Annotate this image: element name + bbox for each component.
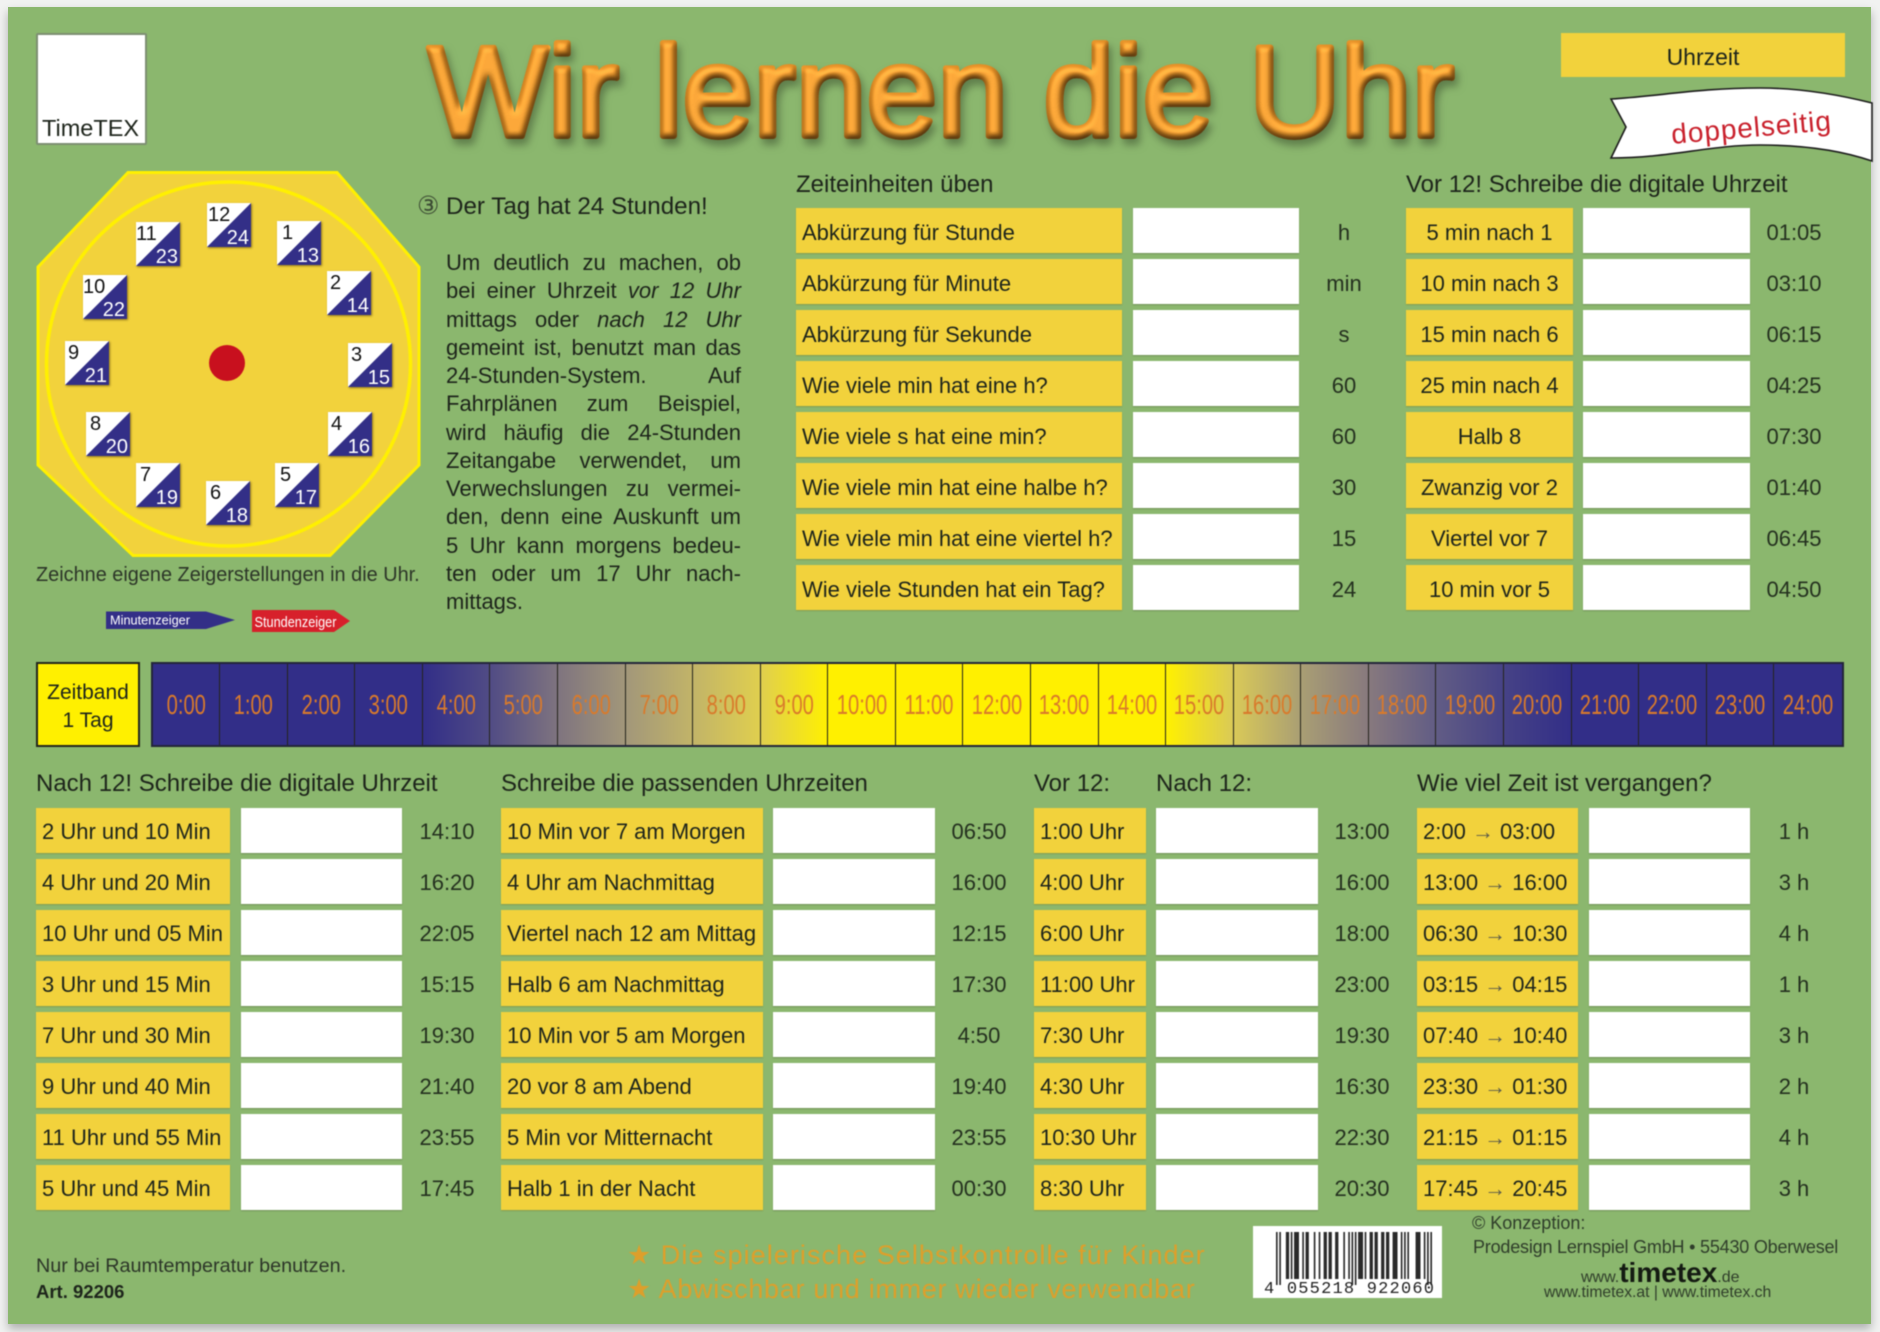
row 6: 30 bbox=[1332, 475, 1356, 500]
row 7: 06:45 bbox=[1766, 526, 1822, 551]
tag: Uhrzeit: Uhrzeit bbox=[1667, 44, 1739, 70]
paragraph: Um deutlich zu machen, ob bbox=[446, 250, 741, 275]
time band 0:00 to 24:00: 22:00 bbox=[1647, 688, 1698, 720]
title: Wir lernen die Uhr bbox=[428, 21, 1454, 164]
row 1: Abkürzung für Stunde bbox=[802, 220, 1015, 245]
time band 0:00 to 24:00: 17:00 bbox=[1309, 688, 1360, 720]
tile 5/17 bbox=[275, 463, 319, 509]
row 4 bbox=[1406, 360, 1822, 408]
tile 2/14: 2 bbox=[330, 272, 341, 294]
row 5 bbox=[796, 411, 1356, 458]
row 1 bbox=[500, 807, 1007, 854]
time band 0:00 to 24:00: 11:00 bbox=[905, 688, 954, 720]
tile 8/20: 8 bbox=[90, 413, 101, 435]
row 5 bbox=[1417, 1012, 1847, 1057]
row 4 bbox=[1417, 961, 1847, 1006]
legend: Minutenzeiger arrow bbox=[106, 612, 235, 629]
row 1: 1:00 Uhr bbox=[1040, 819, 1124, 844]
tile 11/23 bbox=[136, 222, 180, 268]
row 4 bbox=[1034, 961, 1406, 1006]
row 3: Viertel nach 12 am Mittag bbox=[507, 921, 756, 946]
row 2: 16:00 bbox=[951, 870, 1007, 895]
heading: Wie viel Zeit ist vergangen? bbox=[1417, 770, 1712, 797]
row 5: Wie viele s hat eine min? bbox=[802, 424, 1047, 449]
paragraph: 24-Stunden-System. Auf bbox=[446, 363, 741, 388]
row 3 bbox=[1034, 910, 1406, 955]
numbered heading: Der Tag hat 24 Stunden! bbox=[446, 193, 708, 220]
row 5: Halb 8 bbox=[1458, 424, 1521, 449]
time band 0:00 to 24:00: 5:00 bbox=[504, 688, 543, 720]
legend: Minutenzeiger arrow: Minutenzeiger bbox=[110, 612, 191, 628]
tile 7/19 bbox=[136, 463, 180, 509]
row 8: 24 bbox=[1332, 577, 1356, 602]
row 3: s bbox=[1338, 322, 1350, 347]
row 6: 20 vor 8 am Abend bbox=[507, 1074, 692, 1099]
slogan 2: ★ Abwischbar und immer wieder verwendbar bbox=[627, 1274, 1195, 1304]
row 2: 16:20 bbox=[419, 870, 475, 895]
label: Zeitband 1 Tag bbox=[36, 662, 140, 747]
row 5 bbox=[1034, 1012, 1406, 1057]
website: www.timetex.de bbox=[1581, 1257, 1740, 1288]
row 8: 17:45 → 20:45 bbox=[1423, 1176, 1567, 1201]
row 6: 16:30 bbox=[1334, 1074, 1390, 1099]
label: Zeitband 1 Tag: 1 Tag bbox=[62, 709, 114, 732]
tile 3/15 bbox=[348, 343, 392, 389]
label: Zeitband 1 Tag: Zeitband bbox=[47, 681, 129, 704]
row 8: 3 h bbox=[1779, 1176, 1809, 1201]
row 2: 4:00 Uhr bbox=[1040, 870, 1124, 895]
row 8 bbox=[1406, 564, 1822, 612]
copyright line: © Konzeption: bbox=[1472, 1213, 1585, 1233]
row 7 bbox=[36, 1113, 475, 1160]
row 2: Abkürzung für Minute bbox=[802, 271, 1011, 296]
tile 2/14: 14 bbox=[347, 295, 369, 317]
row 5: 60 bbox=[1332, 424, 1356, 449]
time band 0:00 to 24:00: 7:00 bbox=[639, 688, 678, 720]
publisher line: Prodesign Lernspiel GmbH • 55430 Oberwesel bbox=[1473, 1237, 1838, 1257]
row 5: 19:30 bbox=[1334, 1023, 1390, 1048]
row 5 bbox=[36, 1011, 475, 1058]
time band 0:00 to 24:00: 2:00 bbox=[301, 688, 341, 720]
row 2: 16:00 bbox=[1334, 870, 1390, 895]
other websites: www.timetex.at | www.timetex.ch bbox=[1544, 1284, 1771, 1301]
row 3: 6:00 Uhr bbox=[1040, 921, 1124, 946]
row 4: 25 min nach 4 bbox=[1420, 373, 1559, 398]
paragraph: gemeint ist, benutzt man das bbox=[446, 335, 741, 360]
row 8: Halb 1 in der Nacht bbox=[507, 1176, 695, 1201]
logo: TimeTEX bbox=[36, 33, 147, 145]
row 4: 11:00 Uhr bbox=[1040, 972, 1135, 997]
panel: Wie viel Zeit ist vergangen bbox=[1417, 770, 1847, 1210]
row 2 bbox=[500, 858, 1007, 906]
tile 5/17: 17 bbox=[295, 487, 317, 509]
tag: Uhrzeit bbox=[1561, 33, 1845, 77]
row 6: 23:30 → 01:30 bbox=[1423, 1074, 1567, 1099]
time band 0:00 to 24:00: 1:00 bbox=[234, 688, 273, 720]
row 8: 00:30 bbox=[951, 1176, 1007, 1201]
row 4 bbox=[500, 960, 1007, 1008]
tile 10/22: 22 bbox=[103, 299, 125, 321]
row 7 bbox=[796, 513, 1356, 560]
row 6 bbox=[796, 462, 1356, 510]
tile 4/16 bbox=[328, 412, 372, 458]
paragraph: mittags. bbox=[446, 589, 523, 614]
tile 1/13: 1 bbox=[282, 222, 293, 244]
row 6 bbox=[1417, 1063, 1847, 1108]
time band 0:00 to 24:00: 21:00 bbox=[1580, 688, 1630, 720]
row 1: 5 min nach 1 bbox=[1427, 220, 1552, 245]
row 6: Wie viele min hat eine halbe h? bbox=[802, 475, 1108, 500]
ribbon: doppelseitig: doppelseitig bbox=[1670, 105, 1832, 150]
legend: Stundenzeiger arrow: Stundenzeiger bbox=[254, 614, 336, 631]
row 5: 4:50 bbox=[958, 1023, 1000, 1048]
tile 10/22 bbox=[83, 275, 127, 321]
row 4: Halb 6 am Nachmittag bbox=[507, 972, 725, 997]
row 8 bbox=[501, 1165, 1021, 1210]
paragraph: Fahrplänen zum Beispiel, bbox=[446, 391, 741, 416]
row 5 bbox=[500, 1011, 1000, 1058]
time band 0:00 to 24:00: 9:00 bbox=[774, 688, 814, 720]
tile 12/24 bbox=[207, 203, 251, 249]
time band 0:00 to 24:00: 23:00 bbox=[1715, 688, 1765, 720]
row 8: 17:45 bbox=[419, 1176, 475, 1201]
row 8 bbox=[796, 564, 1356, 612]
row 7: 10:30 Uhr bbox=[1040, 1125, 1137, 1150]
paragraph: wird häufig die 24-Stunden bbox=[446, 420, 741, 444]
heading: Nach 12: Nach 12: bbox=[1156, 770, 1252, 797]
row 7: 5 Min vor Mitternacht bbox=[507, 1125, 712, 1150]
row 2: 4 Uhr am Nachmittag bbox=[507, 870, 715, 895]
row 7: 23:55 bbox=[951, 1125, 1007, 1150]
tile 4/16: 16 bbox=[348, 436, 370, 458]
row 5: 07:30 bbox=[1766, 424, 1822, 449]
tile 2/14 bbox=[327, 271, 371, 317]
row 5: 07:40 → 10:40 bbox=[1423, 1023, 1567, 1048]
tile 9/21: 21 bbox=[85, 365, 107, 387]
row 2: min bbox=[1326, 271, 1362, 296]
row 4: 15:15 bbox=[419, 972, 475, 997]
row 7 bbox=[1406, 513, 1822, 560]
row 2: 03:10 bbox=[1766, 271, 1822, 296]
time band 0:00 to 24:00: 6:00 bbox=[572, 688, 611, 720]
row 2: 10 min nach 3 bbox=[1420, 271, 1559, 296]
row 2: 13:00 → 16:00 bbox=[1423, 870, 1567, 895]
row 1 bbox=[796, 207, 1350, 254]
row 6: 19:40 bbox=[951, 1074, 1007, 1099]
row 3 bbox=[1417, 910, 1847, 955]
clock caption: Zeichne eigene Zeigerstellungen in die Uhr. bbox=[36, 564, 420, 586]
row 3: 06:15 bbox=[1766, 322, 1822, 347]
row 6 bbox=[1034, 1063, 1406, 1108]
tile 3/15: 3 bbox=[351, 344, 362, 366]
clock centre dot bbox=[209, 345, 245, 381]
panel: Nach 12 digitale Uhrzeit bbox=[36, 770, 475, 1212]
row 2: 4 Uhr und 20 Min bbox=[42, 870, 211, 895]
row 6: 4:30 Uhr bbox=[1040, 1074, 1124, 1099]
time band 0:00 to 24:00: 3:00 bbox=[369, 688, 408, 720]
tile 9/21 bbox=[65, 341, 109, 387]
row 1: 10 Min vor 7 am Morgen bbox=[507, 819, 745, 844]
heading: Schreibe die passenden Uhrzeiten bbox=[501, 770, 868, 797]
article number: Art. 92206 bbox=[36, 1281, 124, 1302]
paragraph: Zeitangabe verwendet, um bbox=[446, 448, 741, 473]
tile 4/16: 4 bbox=[331, 413, 342, 435]
row 7 bbox=[1417, 1114, 1847, 1159]
row 7 bbox=[501, 1114, 1021, 1159]
row 2 bbox=[796, 258, 1362, 306]
time band 0:00 to 24:00: 19:00 bbox=[1445, 688, 1495, 720]
row 8: 04:50 bbox=[1766, 577, 1822, 602]
row 1: 06:50 bbox=[951, 819, 1007, 844]
heading: Zeiteinheiten üben bbox=[796, 171, 993, 198]
time band 0:00 to 24:00: 4:00 bbox=[436, 688, 476, 720]
paragraph bbox=[446, 250, 742, 614]
row 1: 2 Uhr und 10 Min bbox=[42, 819, 211, 844]
numbered heading: ③ bbox=[417, 192, 439, 220]
row 8: 8:30 Uhr bbox=[1040, 1176, 1124, 1201]
tile 6/18: 6 bbox=[210, 482, 221, 504]
tile 8/20 bbox=[86, 412, 130, 458]
tile 9/21: 9 bbox=[68, 342, 79, 364]
row 6 bbox=[1406, 462, 1822, 510]
row 5: 10 Min vor 5 am Morgen bbox=[507, 1023, 745, 1048]
tile 10/22: 10 bbox=[83, 276, 105, 298]
row 3 bbox=[796, 309, 1350, 356]
note: room temperature: Nur bei Raumtemperatur benutzen. bbox=[36, 1255, 346, 1277]
row 1 bbox=[1417, 808, 1847, 853]
clock face octagon bbox=[38, 172, 419, 556]
barcode bbox=[1253, 1226, 1442, 1298]
row 3: Abkürzung für Sekunde bbox=[802, 322, 1032, 347]
panel: Schreibe die passenden Uhrzeiten bbox=[500, 770, 1007, 1212]
row 7: 4 h bbox=[1779, 1125, 1809, 1150]
time band 0:00 to 24:00 bbox=[150, 662, 1844, 747]
logo: TimeTEX: TimeTEX bbox=[42, 115, 139, 141]
tile 6/18 bbox=[206, 481, 250, 527]
row 6 bbox=[36, 1062, 475, 1110]
time band 0:00 to 24:00: 12:00 bbox=[971, 688, 1022, 720]
tile 7/19: 19 bbox=[156, 487, 178, 509]
row 7: 23:55 bbox=[419, 1125, 475, 1150]
tile 6/18: 18 bbox=[226, 505, 248, 527]
row 4: 60 bbox=[1332, 373, 1356, 398]
row 8 bbox=[1417, 1165, 1847, 1210]
heading: Vor 12: Vor 12: bbox=[1034, 770, 1110, 797]
row 3: 06:30 → 10:30 bbox=[1423, 921, 1567, 946]
heading: Nach 12! Schreibe die digitale Uhrzeit bbox=[36, 770, 438, 797]
time band 0:00 to 24:00: 20:00 bbox=[1512, 688, 1563, 720]
row 1: 1 h bbox=[1779, 819, 1809, 844]
row 7: 21:15 → 01:15 bbox=[1423, 1125, 1567, 1150]
row 3: 22:05 bbox=[419, 921, 475, 946]
row 7: 15 bbox=[1332, 526, 1356, 551]
row 2 bbox=[1406, 258, 1822, 306]
row 3: 4 h bbox=[1779, 921, 1809, 946]
time band 0:00 to 24:00: 10:00 bbox=[836, 688, 887, 720]
row 8: 10 min vor 5 bbox=[1429, 577, 1550, 602]
tile 3/15: 15 bbox=[368, 367, 390, 389]
row 3: 10 Uhr und 05 Min bbox=[42, 921, 223, 946]
row 3 bbox=[36, 909, 475, 956]
tile 12/24: 12 bbox=[208, 204, 230, 226]
tile 1/13: 13 bbox=[297, 245, 319, 267]
text block: 24 hour explanation bbox=[417, 192, 742, 614]
row 1: 2:00 → 03:00 bbox=[1423, 819, 1555, 844]
tile 11/23: 23 bbox=[156, 246, 178, 268]
row 7: 22:30 bbox=[1334, 1125, 1390, 1150]
row 7: Wie viele min hat eine viertel h? bbox=[802, 526, 1113, 551]
time band 0:00 to 24:00: 18:00 bbox=[1377, 688, 1427, 720]
row 8: Wie viele Stunden hat ein Tag? bbox=[802, 577, 1105, 602]
paragraph: den, denn eine Auskunft um bbox=[446, 504, 741, 529]
ribbon: doppelseitig bbox=[1609, 86, 1874, 163]
row 1: h bbox=[1338, 220, 1350, 245]
row 5: 19:30 bbox=[419, 1023, 475, 1048]
panel: Vor 12 / Nach 12 bbox=[1034, 770, 1406, 1210]
tile 8/20: 20 bbox=[106, 436, 128, 458]
row 1: 13:00 bbox=[1334, 819, 1390, 844]
row 4: 04:25 bbox=[1766, 373, 1822, 398]
row 3: 18:00 bbox=[1334, 921, 1390, 946]
row 2 bbox=[36, 858, 475, 906]
row 7: Viertel vor 7 bbox=[1431, 526, 1548, 551]
row 8: 5 Uhr und 45 Min bbox=[42, 1176, 211, 1201]
row 4: 1 h bbox=[1779, 972, 1809, 997]
tile 7/19: 7 bbox=[140, 464, 151, 486]
row 2 bbox=[1417, 859, 1847, 904]
panel: Vor 12 digitale Uhrzeit bbox=[1406, 171, 1822, 612]
paragraph: Verwechslungen zu vermei- bbox=[446, 476, 741, 501]
tile 12/24: 24 bbox=[227, 227, 249, 249]
row 2 bbox=[1034, 859, 1406, 904]
clock circle bbox=[46, 182, 410, 546]
row 3: 12:15 bbox=[951, 921, 1007, 946]
row 3 bbox=[1406, 309, 1822, 356]
row 2: 3 h bbox=[1779, 870, 1809, 895]
row 5 bbox=[1406, 411, 1822, 458]
row 5: 3 h bbox=[1779, 1023, 1809, 1048]
row 8: 20:30 bbox=[1334, 1176, 1390, 1201]
clock and hand legend bbox=[36, 170, 422, 633]
heading: Vor 12! Schreibe die digitale Uhrzeit bbox=[1406, 171, 1788, 198]
time band 0:00 to 24:00: 16:00 bbox=[1242, 688, 1292, 720]
tile 5/17: 5 bbox=[280, 464, 291, 486]
row 3 bbox=[500, 909, 1007, 956]
row 5: 7:30 Uhr bbox=[1040, 1023, 1124, 1048]
time band 0:00 to 24:00: 24:00 bbox=[1783, 688, 1833, 720]
row 6: Zwanzig vor 2 bbox=[1421, 475, 1558, 500]
row 1 bbox=[1034, 808, 1406, 853]
panel: Zeiteinheiten üben bbox=[796, 171, 1362, 612]
slogan 1: ★ Die spielerische Selbstkontrolle für Kinder bbox=[627, 1240, 1206, 1270]
row 6: 2 h bbox=[1779, 1074, 1809, 1099]
paragraph: mittags oder nach 12 Uhr bbox=[446, 306, 741, 332]
row 4: 03:15 → 04:15 bbox=[1423, 972, 1567, 997]
time band 0:00 to 24:00: 15:00 bbox=[1174, 688, 1225, 720]
tile 1/13 bbox=[277, 221, 321, 267]
row 6: 21:40 bbox=[419, 1074, 475, 1099]
paragraph: bei einer Uhrzeit vor 12 Uhr bbox=[446, 278, 741, 303]
row 3: 15 min nach 6 bbox=[1420, 322, 1559, 347]
row 4: 23:00 bbox=[1334, 972, 1390, 997]
row 7 bbox=[1034, 1114, 1406, 1159]
row 4: 17:30 bbox=[951, 972, 1007, 997]
row 1: 14:10 bbox=[419, 819, 475, 844]
row 1: 01:05 bbox=[1766, 220, 1822, 245]
time band 0:00 to 24:00: 14:00 bbox=[1107, 688, 1157, 720]
paragraph: ten oder um 17 Uhr nach- bbox=[446, 561, 741, 586]
row 4 bbox=[796, 360, 1356, 408]
row 7: 11 Uhr und 55 Min bbox=[42, 1125, 221, 1150]
row 4 bbox=[36, 960, 475, 1008]
time band 0:00 to 24:00: 8:00 bbox=[707, 688, 746, 720]
paragraph: 5 Uhr kann morgens bedeu- bbox=[446, 532, 741, 558]
row 1 bbox=[1406, 207, 1822, 254]
row 8 bbox=[36, 1164, 475, 1212]
tile 11/23: 11 bbox=[136, 223, 157, 245]
row 6 bbox=[500, 1062, 1007, 1110]
row 1 bbox=[36, 807, 475, 854]
row 6: 01:40 bbox=[1766, 475, 1822, 500]
time band 0:00 to 24:00: 13:00 bbox=[1039, 688, 1090, 720]
row 8 bbox=[1034, 1165, 1406, 1210]
row 6: 9 Uhr und 40 Min bbox=[42, 1074, 211, 1099]
row 5: 7 Uhr und 30 Min bbox=[42, 1023, 211, 1048]
row 4: Wie viele min hat eine h? bbox=[802, 373, 1048, 398]
imprint bbox=[1472, 1212, 1852, 1312]
row 4: 3 Uhr und 15 Min bbox=[42, 972, 211, 997]
time band 0:00 to 24:00: 0:00 bbox=[166, 688, 205, 720]
